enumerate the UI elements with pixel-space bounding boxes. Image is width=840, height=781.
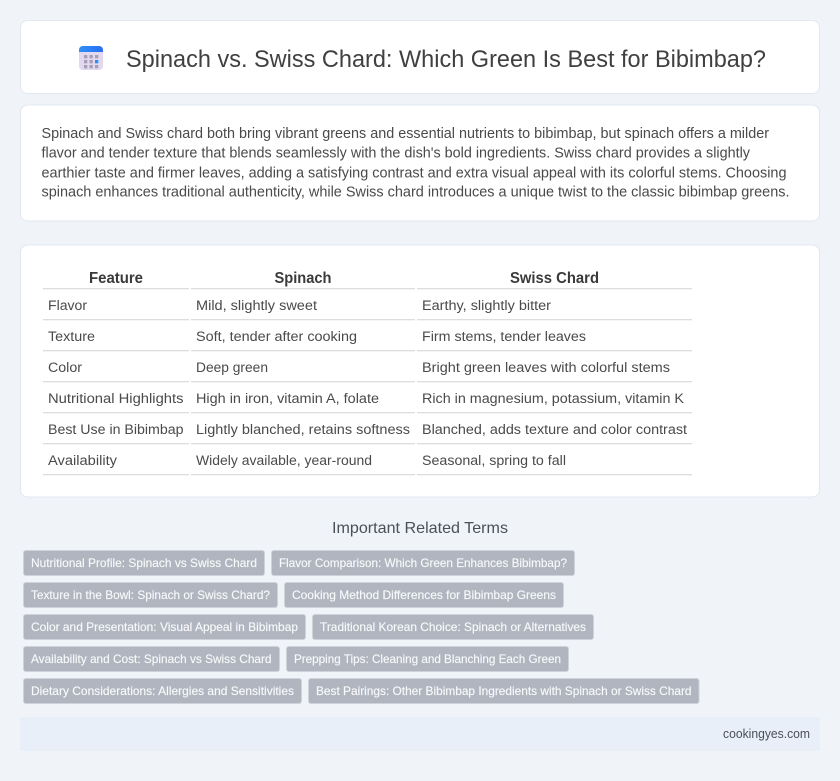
row: flavor: Flavor [48,298,87,314]
row: color [48,360,670,376]
footer [20,717,820,751]
table header: Spinach [274,270,332,287]
tag [308,678,699,704]
table header [89,270,599,287]
intro text [42,126,790,200]
related terms tags [24,550,699,704]
tag [24,550,264,576]
intro text: flavor and tender texture that blends seamlessly with the dish's bold ingredients. Swiss chard provides a slightly [42,146,751,162]
heading: important related terms: Important Related Terms [332,520,508,537]
tag [24,678,302,704]
intro text: Spinach and Swiss chard both bring vibrant greens and essential nutrients to bibimbap, but spinach offers a milder [42,126,769,142]
row: color: Color [48,360,82,376]
tag [272,550,574,576]
row: availability: Availability [48,453,118,469]
row: availability: Widely available, year-round [196,453,372,469]
row: nutritional highlights: Nutritional Highlights [48,391,184,407]
intro text: earthier taste and firmer leaves, adding a satisfying contrast and extra visual appeal with its colorful stems. Choosing [42,166,786,182]
icon: calendar [79,46,103,70]
row: nutritional highlights: Rich in magnesium, potassium, vitamin K [422,391,685,407]
row: best use in bibimbap: Lightly blanched, retains softness [196,422,410,438]
tag [24,614,306,640]
row: texture: Firm stems, tender leaves [422,329,586,345]
tag: Texture in the Bowl: Spinach or Swiss Chard? [31,588,270,602]
panel: comparison table [20,245,820,497]
row: best use in bibimbap [48,422,687,438]
tag: Prepping Tips: Cleaning and Blanching Each Green [294,652,561,666]
footer source: cookingyes.com [723,727,810,741]
tag: Traditional Korean Choice: Spinach or Alternatives [320,620,586,634]
row: color: Bright green leaves with colorful stems [422,360,670,376]
row: best use in bibimbap: Best Use in Bibimbap [48,422,184,438]
row: nutritional highlights: High in iron, vitamin A, folate [196,391,379,407]
tag: Nutritional Profile: Spinach vs Swiss Chard [31,556,257,570]
tag [286,646,568,672]
row: flavor [48,298,551,314]
tag: Best Pairings: Other Bibimbap Ingredients with Spinach or Swiss Chard [316,684,692,698]
tag: Dietary Considerations: Allergies and Sensitivities [31,684,294,698]
row: availability [48,453,566,469]
intro text: spinach enhances traditional authenticity, while Swiss chard introduces a unique twist to the classic bibimbap greens. [42,184,790,200]
tag: Color and Presentation: Visual Appeal in Bibimbap [31,620,298,634]
row: flavor: Earthy, slightly bitter [422,298,551,314]
row: nutritional highlights [48,391,685,407]
panel: introduction [20,105,820,221]
row: texture: Texture [48,329,95,345]
row: color: Deep green [196,360,268,376]
table header: Feature [89,270,143,287]
title: Spinach vs. Swiss Chard: Which Green Is Best for Bibimbap? [126,46,766,73]
tag [24,582,278,608]
row: availability: Seasonal, spring to fall [422,453,566,469]
tag: Availability and Cost: Spinach vs Swiss Chard [31,652,272,666]
table header: Swiss Chard [510,270,599,287]
tag [312,614,594,640]
row: texture: Soft, tender after cooking [196,329,357,345]
tag [284,582,564,608]
row: best use in bibimbap: Blanched, adds texture and color contrast [422,422,687,438]
row: flavor: Mild, slightly sweet [196,298,317,314]
tag [24,646,280,672]
row: texture [48,329,586,345]
header panel [20,20,820,94]
tag: Flavor Comparison: Which Green Enhances Bibimbap? [279,556,567,570]
tag: Cooking Method Differences for Bibimbap Greens [292,588,556,602]
